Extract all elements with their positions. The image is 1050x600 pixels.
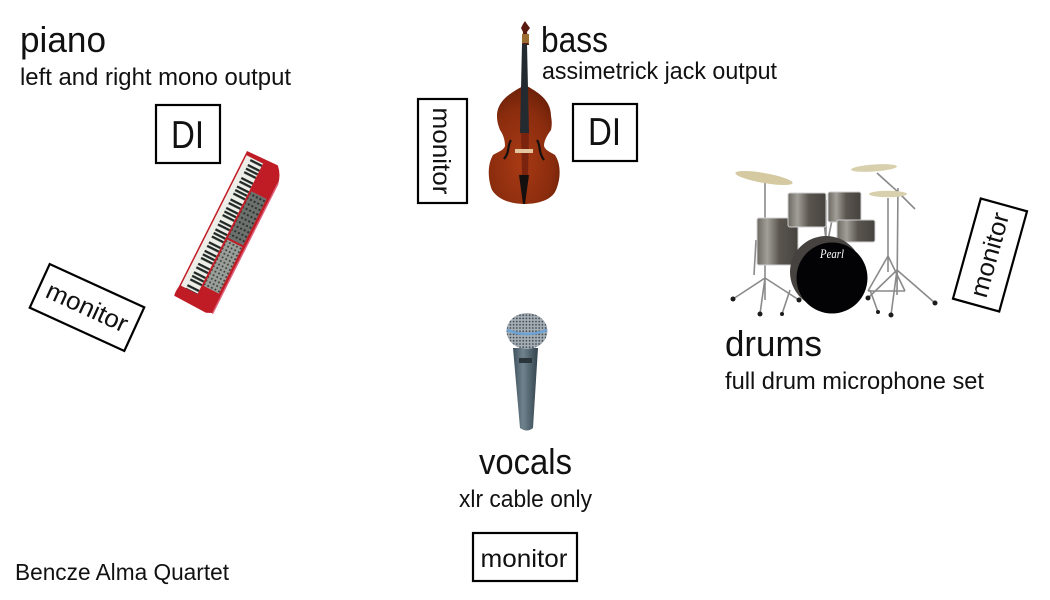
- drums monitor box: monitor: [965, 209, 1015, 301]
- icon: drum kit: Pearl: [819, 246, 844, 261]
- bass DI box: DI: [588, 111, 621, 154]
- drums heading: drums: [725, 323, 822, 364]
- vocals monitor box: monitor: [480, 545, 568, 573]
- bass heading: bass: [541, 19, 608, 60]
- icon: vocal microphone: [506, 313, 548, 430]
- bass DI box: [573, 104, 637, 161]
- piano DI box: DI: [171, 114, 204, 157]
- bass monitor box: [418, 99, 467, 203]
- piano description: left and right mono output: [20, 64, 291, 91]
- piano DI box: [156, 105, 220, 163]
- icon: double bass: [489, 21, 560, 204]
- icon: red stage piano: [173, 150, 286, 316]
- bass monitor box: monitor: [427, 108, 455, 194]
- icon: drum kit: [730, 163, 938, 318]
- bass description: assimetrick jack output: [542, 58, 777, 85]
- vocals heading: vocals: [479, 441, 572, 482]
- piano monitor box: monitor: [42, 277, 132, 338]
- piano monitor box: [30, 264, 144, 351]
- vocals description: xlr cable only: [459, 486, 592, 513]
- drums description: full drum microphone set: [725, 368, 984, 395]
- piano heading: piano: [20, 19, 106, 60]
- drums monitor box: [953, 198, 1027, 312]
- vocals monitor box: [473, 533, 577, 581]
- band name: Bencze Alma Quartet: [15, 559, 229, 585]
